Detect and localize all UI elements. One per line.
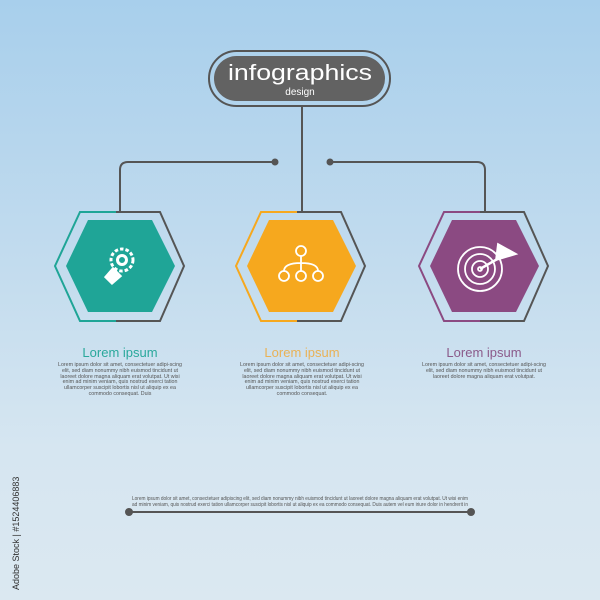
icon: lightbulb gear — [106, 249, 133, 283]
text block: teal — [58, 345, 182, 397]
bottom text: Lorem ipsum dolor sit amet, consectetuer adipiscing elit, sed diam nonummy nibh euismod tincidunt ut laoreet dolore magna aliquam erat volutpat. Ut wisi enim — [132, 496, 468, 502]
text block: purple: Lorem ipsum — [446, 345, 522, 360]
watermark id: Adobe Stock | #1524406883 — [11, 477, 21, 590]
text block: orange: Lorem ipsum — [264, 345, 340, 360]
bottom line — [126, 508, 474, 516]
title pill — [209, 51, 390, 106]
text block: teal: Lorem ipsum — [82, 345, 158, 360]
connector lines — [120, 106, 485, 212]
hexagon: orange — [236, 212, 365, 321]
text block: purple: Lorem ipsum dolor sit amet, consectetuer adipi-scing elit, sed diam nonummy nibh euismod tincidunt ut laoreet dolore magna aliquam erat volutpat. — [422, 362, 546, 380]
hexagon: purple — [419, 212, 548, 321]
icon: target — [458, 244, 516, 291]
hexagon: teal — [55, 212, 184, 321]
bottom text — [132, 496, 468, 508]
icon: hierarchy — [279, 246, 323, 281]
text block: orange: Lorem ipsum dolor sit amet, consectetuer adipi-scing elit, sed diam nonummy nibh euismod tincidunt ut laoreet dolore magna aliquam erat volutpat. Ut wisi enim ad minim veniam, quis nostrud exerci tation ullamcorper suscipit lobortis nisl ut aliquip ex ea commodo consequat. — [240, 362, 364, 397]
text block: purple — [422, 345, 546, 380]
text block: orange — [240, 345, 364, 397]
title pill: design — [285, 87, 315, 98]
title pill: infographics — [228, 60, 372, 85]
bottom text: ad minim veniam, quis nostrud exerci tation ullamcorper suscipit lobortis nisl ut aliquip ex ea commodo consequat. Duis autem vel eum iriure dolor in hendrerit in — [132, 502, 468, 508]
text block: teal: Lorem ipsum dolor sit amet, consectetuer adipi-scing elit, sed diam nonummy nibh euismod tincidunt ut laoreet dolore magna aliquam erat volutpat. Ut wisi enim ad minim veniam, quis nostrud exerci tation ullamcorper suscipit lobortis nisl ut aliquip ex ea commodo consequat. Duis — [58, 362, 182, 397]
